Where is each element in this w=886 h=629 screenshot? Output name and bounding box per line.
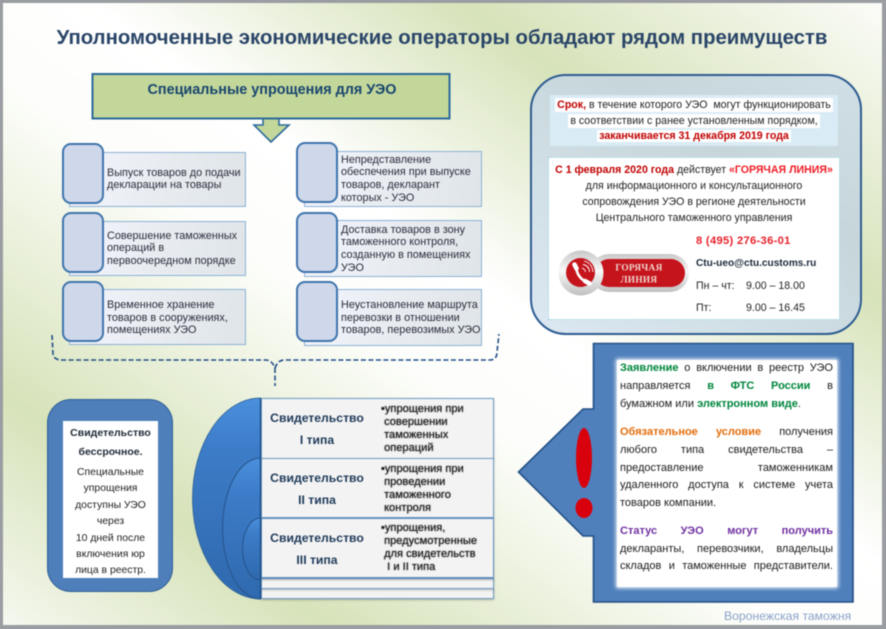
panel: simplification 4 <box>295 141 483 208</box>
label: certificate type II <box>270 471 364 507</box>
list: type III simplifications <box>380 522 478 573</box>
text block: certificate validity: включения юр <box>76 549 145 560</box>
label: certificate type I <box>270 411 364 447</box>
text block: application notice: Статус УЭО могут получить <box>620 525 833 537</box>
panel: simplification 3: Временное хранение <box>107 299 214 311</box>
panel: simplification 5: таможенного контроля, <box>341 236 458 248</box>
dashed bracket pointing to certificates <box>50 333 500 387</box>
panel: simplification 1: декларации на товары <box>107 179 221 191</box>
text block: application notice: складов и таможенные представители. <box>620 560 833 572</box>
panel: simplification 5: Доставка товаров в зону <box>341 224 465 236</box>
text block: certificate validity: упрощения <box>84 483 137 494</box>
text block: application notice: Обязательное условие получения <box>620 426 833 438</box>
row: certificate type II <box>261 458 494 518</box>
list: type I simplifications: операций <box>384 442 434 454</box>
text block: deadline <box>550 95 838 146</box>
panel: simplification 1: Выпуск товаров до подачи <box>107 166 241 178</box>
icon: hotline badge: ЛИНИЯ <box>621 276 657 286</box>
list: type I simplifications: •упрощения при <box>381 402 464 414</box>
panel: perpetual certificate <box>47 399 173 592</box>
panel: simplification 5 <box>295 211 483 278</box>
working hours Friday: Пт: <box>696 302 711 314</box>
working hours Monday to Thursday: Пн – чт: <box>696 280 735 292</box>
panel: simplification 4: обеспечения при выпуске <box>341 166 471 178</box>
hotline phone number: 8 (495) 276-36-01 <box>696 235 791 247</box>
panel: simplification 3: товаров в сооружениях, <box>107 312 228 324</box>
text block: certificate validity: бессрочное. <box>78 446 143 458</box>
row: blank layers <box>261 588 494 599</box>
panel: simplification 2: первоочередном порядке <box>107 255 236 267</box>
list: type II simplifications <box>380 462 464 514</box>
list: type III simplifications: для свидетельств <box>384 548 476 560</box>
text block: certificate validity <box>63 421 158 578</box>
text block: application notice: любого типа свидетельства – <box>620 444 833 456</box>
label: certificate type III <box>270 531 364 567</box>
text block: certificate validity: Специальные <box>77 467 144 478</box>
label: certificate type I: I типа <box>300 433 334 447</box>
text block: application notice: предоставление таможенникам <box>620 462 833 474</box>
working hours Friday: 9.00 – 16.45 <box>746 302 805 314</box>
panel: simplification 2: операций в <box>107 242 164 254</box>
icon: hotline badge <box>558 250 689 296</box>
text block: certificate validity: лица в реестр. <box>75 565 146 576</box>
text block: application notice: декларанты, перевозчики, владельцы <box>620 543 833 555</box>
text block: certificate validity: 10 дней после <box>76 533 145 544</box>
label: certificate type III: III типа <box>296 553 338 567</box>
working hours Friday <box>696 302 806 314</box>
text block: deadline: в соответствии с ранее установленным порядком, <box>570 114 818 126</box>
list: type II simplifications: таможенного <box>384 488 451 500</box>
list: type I simplifications: таможенных <box>384 428 448 440</box>
panel: hotline: 9.00 – 18.00 <box>746 280 805 292</box>
panel: simplification 6: товаров, перевозимых УЭО <box>341 324 480 336</box>
panel: deadline and hotline <box>530 74 862 335</box>
heading: special simplifications with arrow <box>90 72 452 144</box>
label: certificate type II: II типа <box>298 493 336 507</box>
title: Уполномоченные экономические операторы обладают рядом преимуществ <box>57 27 827 49</box>
list: type I simplifications <box>380 402 464 454</box>
panel: simplification 1 <box>61 142 247 208</box>
text block: application notice: Заявление о включении в реестр УЭО <box>620 362 833 374</box>
text block: deadline: заканчивается 31 декабря 2019 года <box>599 130 789 142</box>
icon: exclamation mark <box>576 428 592 518</box>
diagram: three certificate types <box>191 396 496 602</box>
panel: simplification 2: Совершение таможенных <box>107 230 237 242</box>
row: certificate type III <box>261 518 494 579</box>
text block: application notice: товаров компании. <box>620 497 716 509</box>
list: type II simplifications: проведении <box>384 476 445 488</box>
list: type III simplifications: I и II типа <box>387 561 435 573</box>
panel: simplification 4: Непредставление <box>341 154 431 166</box>
panel: simplification 6: Неустановление маршрута <box>341 299 478 311</box>
text block: application notice <box>617 360 837 587</box>
list: type II simplifications: контроля <box>384 502 431 514</box>
hotline email: Ctu-ueo@ctu.customs.ru <box>696 258 816 269</box>
list: type II simplifications: •упрощения при <box>381 462 464 474</box>
text block: certificate validity: доступны УЭО <box>75 500 146 511</box>
text block: hotline description: С 1 февраля 2020 года действует «ГОРЯЧАЯ ЛИНИЯ» <box>555 164 833 176</box>
panel: application notice callout <box>516 342 855 604</box>
label: certificate type II: Свидетельство <box>270 471 364 485</box>
text block: hotline description: Центрального таможенного управления <box>596 212 792 224</box>
panel: simplification 6 <box>295 280 483 347</box>
panel: simplification 5: УЭО <box>341 262 364 274</box>
list: type III simplifications: предусмотренные <box>384 535 477 547</box>
text block: hotline description: для информационного и консультационного <box>586 180 802 192</box>
label: certificate type I: Свидетельство <box>270 411 364 425</box>
footer: source: Воронежская таможня <box>724 609 851 623</box>
text block: hotline description: сопровождения УЭО в регионе деятельности <box>582 196 806 208</box>
text block: certificate validity: Свидетельство <box>70 427 151 439</box>
text block: application notice: направляется в ФТС России в <box>620 380 833 392</box>
label: certificate type III: Свидетельство <box>270 531 364 545</box>
text block: certificate validity: через <box>97 516 124 527</box>
row: certificate type I <box>261 398 494 459</box>
panel: simplification 3: помещениях УЭО <box>107 324 196 336</box>
panel: simplification 2 <box>61 211 247 277</box>
panel: simplification 4: товаров, декларант <box>341 179 440 191</box>
text block: application notice: бумажном или электронном виде. <box>620 398 801 410</box>
panel: simplification 3 <box>61 280 247 346</box>
list: type III simplifications: •упрощения, <box>381 522 445 534</box>
text block: hotline description <box>554 164 834 224</box>
panel: hotline <box>548 157 840 320</box>
panel: simplification 5: созданную в помещениях <box>341 249 470 261</box>
nested semicircles <box>191 396 262 600</box>
text block: deadline: Срок, в течение которого УЭО могут функционировать <box>557 99 831 111</box>
panel: simplification 4: которых - УЭО <box>341 192 414 204</box>
icon: hotline badge: ГОРЯЧАЯ <box>615 264 663 274</box>
panel: simplification 6: перевозки в отношении <box>341 312 460 324</box>
heading: special simplifications with arrow: Специальные упрощения для УЭО <box>148 82 396 98</box>
list: type I simplifications: совершении <box>384 416 448 428</box>
text block: application notice: удаленного доступа к системе учета <box>620 479 833 491</box>
working hours Monday to Thursday <box>696 280 806 292</box>
